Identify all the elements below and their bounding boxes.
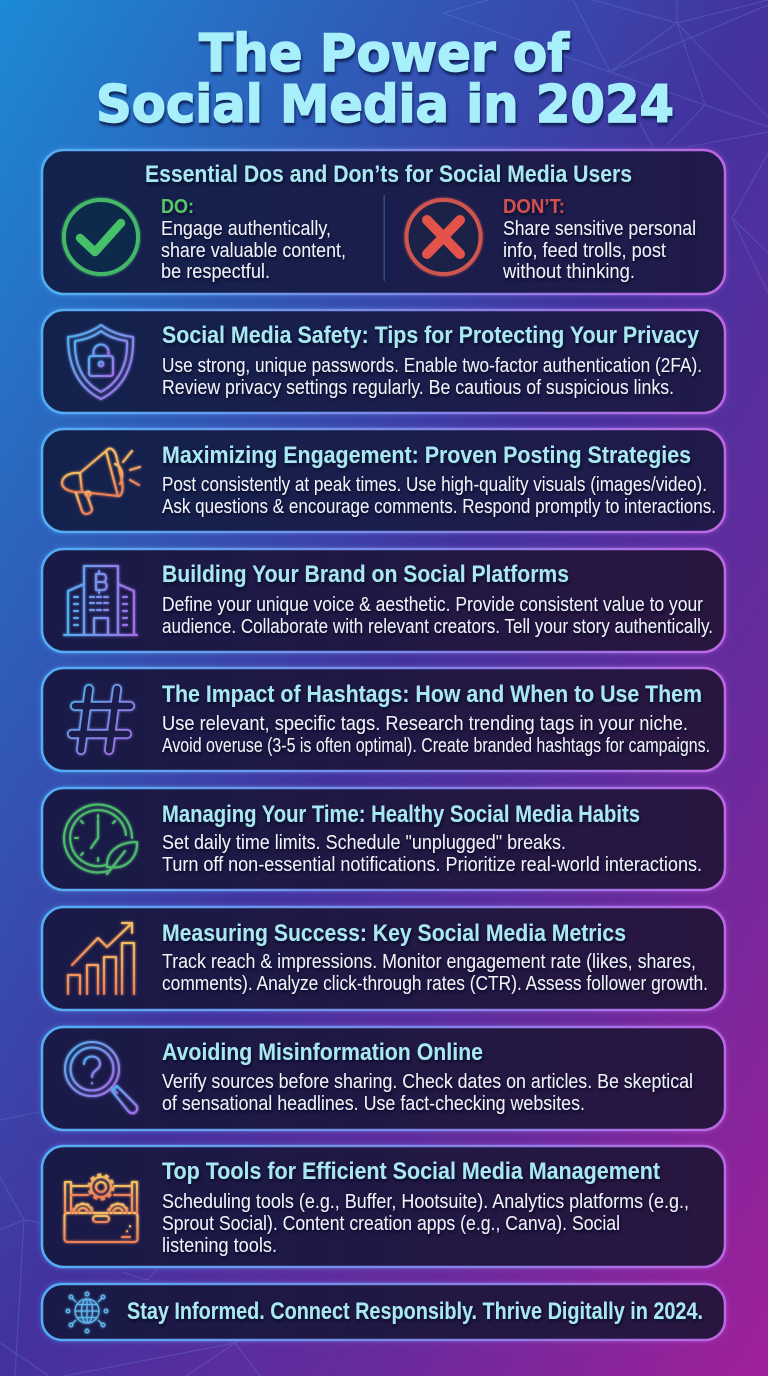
panel: time — [42, 788, 725, 890]
don't column: info, feed trolls, post — [503, 239, 666, 262]
text: engagement — [162, 442, 716, 518]
do column: Engage authentically, — [161, 217, 331, 240]
icon: building — [64, 566, 137, 635]
text: time: Set daily time limits. Schedule "unplugged" breaks. — [162, 831, 566, 854]
text: brand — [162, 561, 713, 638]
icon: toolbox with gears — [64, 1175, 138, 1242]
text: tools: Sprout Social). Content creation apps (e.g., Canva). Social — [162, 1212, 620, 1235]
icon: hashtag — [72, 689, 130, 750]
panel: brand — [42, 549, 725, 652]
text: misinformation: Verify sources before sharing. Check dates on articles. Be skeptical — [162, 1070, 693, 1093]
icon: growth chart — [64, 923, 137, 994]
text: metrics: Track reach & impressions. Monitor engagement rate (likes, shares, — [162, 950, 696, 973]
panel: footer — [42, 1284, 725, 1340]
divider — [384, 195, 385, 281]
do column: be respectful. — [161, 260, 270, 283]
text: brand: Building Your Brand on Social Platforms — [162, 561, 569, 588]
panel: safety — [42, 310, 725, 413]
icon: shield with lock — [68, 325, 133, 399]
text: hashtags: The Impact of Hashtags: How and When to Use Them — [162, 681, 702, 708]
panel: metrics — [42, 907, 725, 1010]
title: Social Media in 2024 — [96, 75, 674, 135]
panel: engagement — [42, 429, 725, 532]
do column: DO: — [161, 195, 194, 218]
text: misinformation: Avoiding Misinformation Online — [162, 1039, 483, 1066]
text: tools: listening tools. — [162, 1234, 277, 1257]
panel: essential dos and don'ts — [42, 150, 725, 294]
text: metrics: Measuring Success: Key Social Media Metrics — [162, 920, 626, 947]
icon: green check — [64, 200, 138, 274]
heading: dos and don'ts: Essential Dos and Don’ts for Social Media Users — [145, 161, 632, 188]
panel: tools — [42, 1146, 725, 1267]
text: time — [162, 801, 702, 876]
text: metrics — [162, 920, 708, 995]
don't column: Share sensitive personal — [503, 217, 696, 240]
title: The Power of — [199, 24, 570, 84]
icon: megaphone — [62, 449, 140, 514]
text: hashtags: Use relevant, specific tags. Research trending tags in your niche. — [162, 712, 688, 735]
don't column — [502, 195, 696, 283]
text: tools — [162, 1158, 689, 1257]
icon: network globe — [66, 1292, 108, 1333]
icon: clock with leaf — [64, 805, 137, 874]
text: engagement: Maximizing Engagement: Proven Posting Strategies — [162, 442, 691, 469]
don't column: DON’T: — [503, 195, 565, 218]
text: time: Managing Your Time: Healthy Social Media Habits — [162, 801, 640, 828]
text: safety — [162, 322, 702, 399]
title — [96, 24, 674, 135]
do column — [161, 195, 346, 283]
text: tools: Scheduling tools (e.g., Buffer, Hootsuite). Analytics platforms (e.g., — [162, 1190, 689, 1213]
panel: misinformation — [42, 1027, 725, 1130]
text: misinformation — [162, 1039, 693, 1115]
text: hashtags — [162, 681, 710, 757]
icon: magnifier with question mark — [65, 1042, 137, 1113]
text: time: Turn off non-essential notifications. Prioritize real-world interactions. — [162, 853, 702, 876]
text: tools: Top Tools for Efficient Social Media Management — [162, 1158, 660, 1185]
text: safety: Social Media Safety: Tips for Protecting Your Privacy — [162, 322, 700, 349]
don't column: without thinking. — [502, 260, 635, 283]
text: misinformation: of sensational headlines. Use fact-checking websites. — [162, 1092, 585, 1115]
icon: red cross — [406, 200, 480, 274]
panel: hashtags — [42, 668, 725, 771]
do column: share valuable content, — [161, 239, 346, 262]
text: safety: Review privacy settings regularly. Be cautious of suspicious links. — [162, 376, 674, 399]
